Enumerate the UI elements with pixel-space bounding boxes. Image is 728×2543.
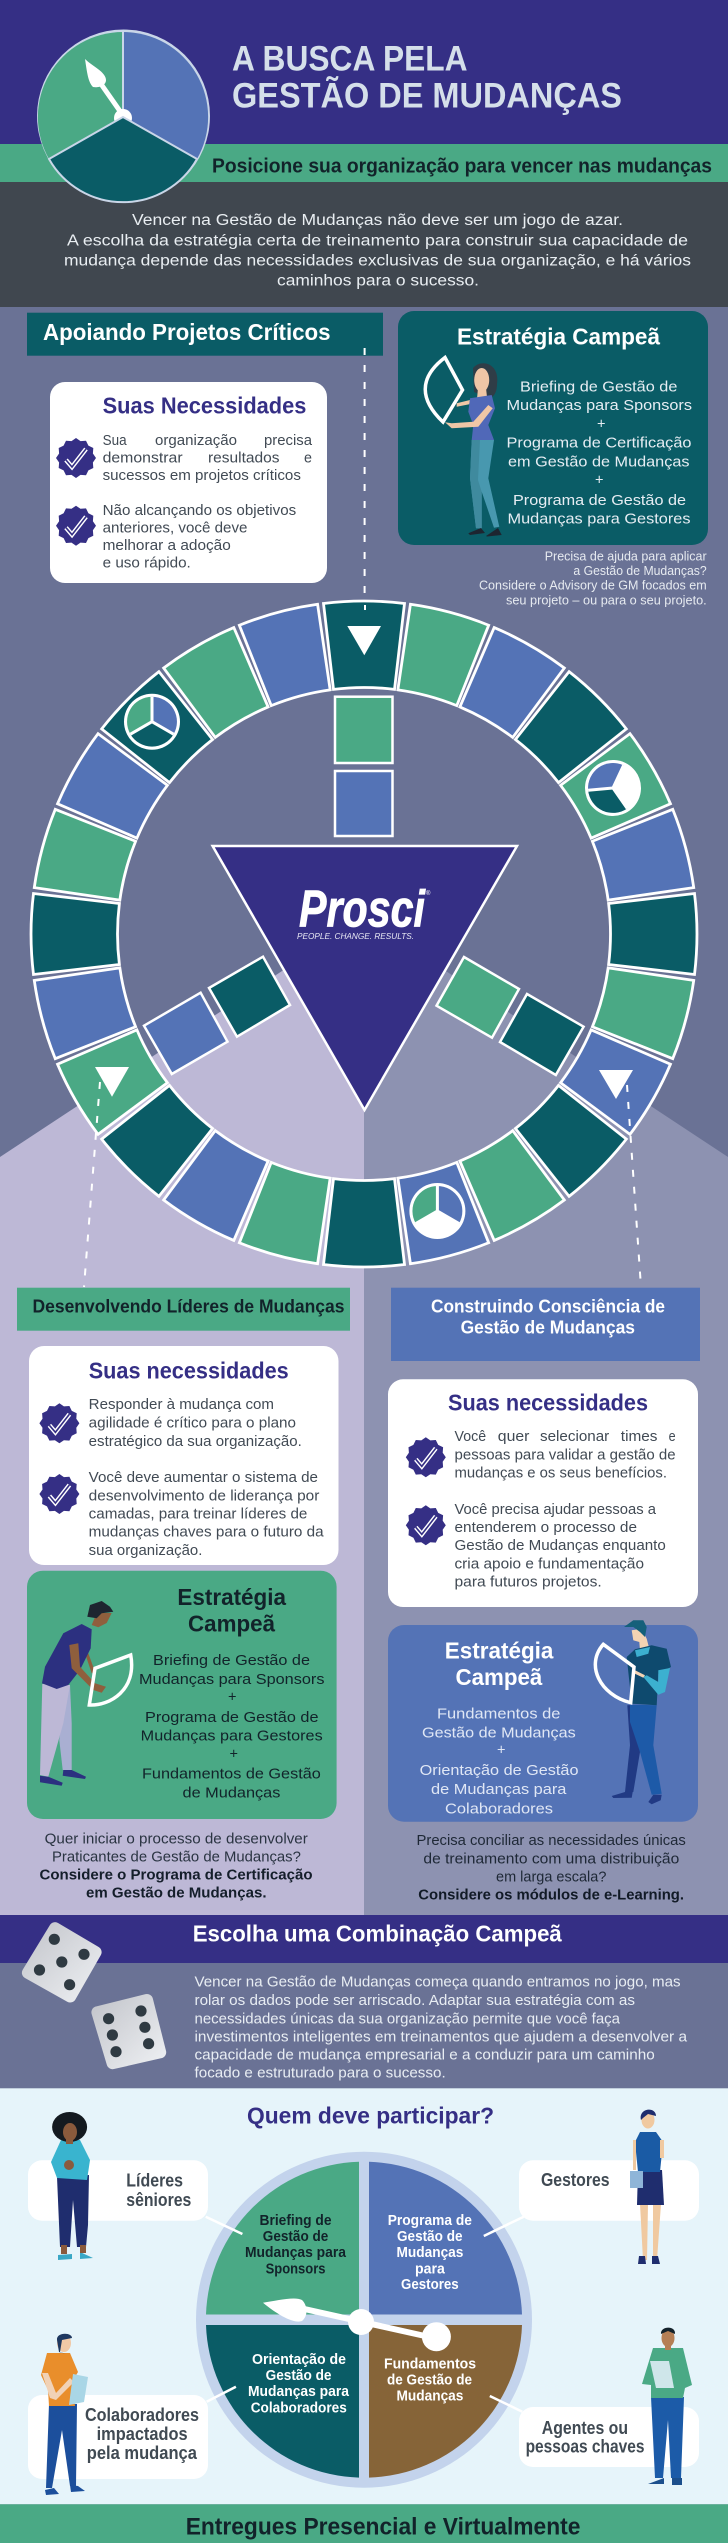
text block: combination [0, 1963, 728, 2088]
panel: Estratégia Campeã right: Estratégia [445, 1637, 554, 1663]
callout: Agentes [519, 2407, 699, 2467]
figure: woman holding wedge [425, 358, 502, 536]
figure: man in blue holding wedge [595, 1620, 671, 1804]
sector: Orientação: Orientação de [252, 2352, 346, 2368]
intro panel [0, 182, 728, 307]
sector: Briefing: Mudanças para [245, 2245, 347, 2261]
section heading: Escolha uma Combinação Campeã [0, 1915, 728, 1963]
caption: left: Considere o Programa de Certificação [40, 1867, 313, 1883]
panel: Suas necessidades right: pessoas para validar a gestão de [454, 1447, 676, 1463]
panel: Suas necessidades right: Suas necessidades [448, 1390, 648, 1416]
panel: Estratégia Campeã top: em Gestão de Mudanças [508, 455, 690, 471]
panel: Estratégia Campeã left: de Mudanças [182, 1786, 280, 1802]
logo triangle: Prosci [213, 846, 517, 1110]
caption: left [40, 1831, 313, 1901]
panel: Suas necessidades left: desenvolvimento de liderança por [89, 1489, 320, 1505]
callout: Líderes sêniores: Líderes [126, 2171, 183, 2191]
panel: Estratégia Campeã left: + [228, 1690, 236, 1706]
caption: advisory: seu projeto – ou para o seu projeto. [506, 593, 707, 607]
panel: Suas necessidades right: cria apoio e fundamentação [454, 1557, 644, 1573]
panel: Estratégia Campeã right: de Mudanças para [431, 1782, 567, 1798]
panel: Suas Necessidades top: demonstrar [103, 450, 183, 466]
panel: Estratégia Campeã top [398, 311, 708, 545]
caption: advisory [479, 550, 707, 607]
panel: Estratégia Campeã top: + [597, 416, 605, 432]
panel: Suas necessidades left [29, 1346, 338, 1565]
sector: Orientação: Colaboradores [251, 2400, 347, 2416]
callout: Líderes sêniores: sêniores [126, 2190, 191, 2210]
panel: Suas Necessidades top: e uso rápido. [103, 555, 191, 571]
dashed connector: top [364, 348, 366, 600]
sector: Programa: Mudanças [396, 2245, 463, 2261]
panel: Estratégia Campeã top: Programa de Certificação [506, 436, 692, 452]
sector: Programa: Programa de [388, 2213, 472, 2229]
panel: Estratégia Campeã right: Orientação de Gestão [420, 1763, 578, 1779]
callout: Colaboradores: pela mudança [87, 2443, 198, 2463]
panel: Estratégia Campeã top: Programa de Gestão de [513, 493, 686, 509]
dashed connector: left [84, 1082, 100, 1287]
needle [263, 2298, 451, 2351]
text block: combination: investimentos inteligentes em treinamentos que ajudem a desenvolver a [194, 2029, 688, 2045]
panel: who should attend [0, 2088, 728, 2504]
caption: advisory: a Gestão de Mudanças? [573, 564, 707, 578]
intro panel: caminhos para o sucesso. [277, 273, 479, 290]
card stack: inner left [144, 957, 290, 1074]
panel: Estratégia Campeã right: Colaboradores [445, 1801, 553, 1817]
caption: right [416, 1833, 686, 1903]
figure: manager woman [630, 2110, 664, 2264]
figure: agent man green [642, 2328, 692, 2485]
intro panel: A escolha da estratégia certa de treinamento para construir sua capacidade de [67, 232, 688, 250]
sector: Briefing: Sponsors [266, 2261, 326, 2277]
heading: Apoiando Projetos Críticos [27, 313, 383, 356]
panel: Suas necessidades left: Você deve aumentar o sistema de [89, 1470, 318, 1486]
dashed connector top over tile [364, 605, 366, 610]
panel: Estratégia Campeã top: Mudanças para Sponsors [506, 398, 692, 414]
sector: Fundamentos: Mudanças [396, 2389, 463, 2405]
panel: Suas Necessidades top: Suas Necessidades [103, 392, 306, 418]
panel: Suas necessidades left: Suas necessidades [89, 1357, 289, 1383]
callout: Líderes sêniores [28, 2160, 208, 2221]
sector: Orientação: Gestão de [266, 2368, 332, 2384]
logo triangle: Prosci: ® [426, 890, 431, 897]
sector: Programa: Gestores [401, 2277, 459, 2293]
text block: combination: capacidade de mudança empresarial e a conduzir para um caminho [194, 2047, 655, 2063]
icon: die six [97, 2000, 160, 2063]
heading: Construindo Consciência: Gestão de Mudanças [461, 1317, 635, 1337]
panel: Suas Necessidades top: Não alcançando os objetivos [103, 503, 296, 519]
panel: Estratégia Campeã left: Estratégia [177, 1584, 286, 1610]
panel: Estratégia Campeã left [27, 1571, 337, 1819]
panel: Estratégia Campeã right [388, 1620, 698, 1822]
figure: employee man orange [41, 2334, 88, 2495]
game board ring [31, 601, 697, 1267]
sector: Briefing: Gestão de [263, 2229, 328, 2245]
panel: Estratégia Campeã left: Fundamentos de Gestão [142, 1766, 321, 1782]
caption: left: em Gestão de Mudanças. [86, 1885, 266, 1901]
lower right background [364, 917, 728, 1915]
icon: triangle marker top [347, 626, 381, 655]
panel: Suas Necessidades top: precisa [264, 433, 313, 449]
logo triangle: Prosci: Prosci [299, 881, 426, 939]
section heading: Escolha uma Combinação Campeã: Escolha uma Combinação Campeã [193, 1921, 562, 1947]
panel: Suas necessidades left: mudanças chaves para o futuro da [89, 1525, 325, 1541]
caption: advisory: Precisa de ajuda para aplicar [545, 550, 707, 564]
sector: Fundamentos [369, 2325, 522, 2478]
sector: Programa: para [415, 2261, 446, 2277]
sector: Fundamentos: Fundamentos [384, 2357, 476, 2373]
caption: advisory: Considere o Advisory de GM focados em [479, 579, 707, 593]
sector: Programa [369, 2162, 522, 2314]
panel: Suas Necessidades top: sucessos em projetos críticos [103, 468, 301, 484]
panel: Estratégia Campeã left: Mudanças para Sponsors [139, 1672, 324, 1688]
heading: Apoiando Projetos Críticos: Apoiando Projetos Críticos [43, 319, 331, 345]
header band [0, 0, 728, 182]
badge 1 [56, 438, 96, 478]
callout: Colaboradores: Colaboradores [85, 2405, 199, 2425]
text block: combination: rolar os dados pode ser arriscado. Adaptar sua estratégia com as [194, 1993, 635, 2009]
sector: Programa: Gestão de [397, 2229, 462, 2245]
logo triangle: Prosci: PEOPLE. CHANGE. RESULTS. [297, 931, 414, 941]
panel: Suas necessidades right: entenderem o processo de [454, 1520, 637, 1536]
panel: Estratégia Campeã right: Gestão de Mudanças [422, 1725, 576, 1741]
caption: right: em larga escala? [496, 1870, 606, 1886]
caption: left: Quer iniciar o processo de desenvolver [45, 1831, 308, 1847]
chart: spinner of programs [196, 2152, 532, 2488]
sector: Briefing: Briefing de [260, 2213, 332, 2229]
callout: Agentes: Agentes ou [542, 2418, 628, 2438]
caption: right: Precisa conciliar as necessidades únicas [416, 1833, 686, 1849]
caption: right: de treinamento com uma distribuição [423, 1851, 679, 1867]
panel: Suas Necessidades top: organização [155, 433, 237, 449]
icon: triangle marker left [95, 1067, 129, 1097]
footer band [0, 2504, 728, 2543]
text block: combination: Vencer na Gestão de Mudanças começa quando entramos no jogo, mas [194, 1975, 681, 1991]
intro panel: Vencer na Gestão de Mudanças não deve ser um jogo de azar. [132, 212, 623, 229]
panel: Suas necessidades right: Você [454, 1429, 486, 1445]
panel: Suas necessidades left: estratégico da sua organização. [89, 1434, 302, 1450]
panel: Suas Necessidades top: resultados [208, 450, 280, 466]
panel: Estratégia Campeã right: Campeã [456, 1664, 543, 1690]
caption: left: Praticantes de Gestão de Mudanças? [52, 1850, 301, 1866]
intro panel: mudança depende das necessidades exclusivas de sua organização, e há vários [64, 253, 691, 270]
dashed connector: right [627, 1085, 641, 1287]
badge 1 [406, 1437, 446, 1477]
sector: Orientação [206, 2325, 359, 2478]
panel: Estratégia Campeã left: Briefing de Gestão de [153, 1653, 310, 1669]
icon: spinner on green tile [576, 751, 650, 825]
panel: Estratégia Campeã top: Briefing de Gestão de [520, 380, 677, 396]
panel: Suas Necessidades top [50, 382, 327, 583]
footer band: Entregues Presencial e Virtualmente [186, 2513, 580, 2540]
sector: Briefing [206, 2162, 359, 2314]
panel: Suas necessidades right: Gestão de Mudanças enquanto [454, 1538, 666, 1554]
icon: spinner on blue tile [409, 1183, 465, 1239]
panel: Suas Necessidades top: anteriores, você deve [103, 520, 247, 536]
card stack: inner top [335, 697, 392, 836]
panel: Suas necessidades left: agilidade é crítico para o plano [89, 1416, 296, 1432]
text block: combination: necessidades únicas da sua organização permite que você faça [194, 2011, 621, 2027]
panel: Suas necessidades right [388, 1379, 698, 1607]
callout: Colaboradores [28, 2395, 208, 2479]
caption: right: Considere os módulos de e-Learning. [418, 1887, 684, 1903]
panel: Estratégia Campeã top: Mudanças para Gestores [508, 511, 690, 527]
panel: Suas Necessidades top: Sua [103, 433, 127, 449]
panel: Estratégia Campeã right: Fundamentos de [437, 1706, 560, 1722]
panel: Suas necessidades right: Você precisa ajudar pessoas a [454, 1502, 657, 1518]
callout: Colaboradores: impactados [97, 2424, 188, 2444]
sector: Orientação: Mudanças para [248, 2384, 350, 2400]
sector: Fundamentos: de Gestão de [387, 2372, 472, 2388]
panel: Estratégia Campeã right: + [497, 1742, 505, 1758]
panel: Estratégia Campeã top: Estratégia Campeã [457, 324, 660, 350]
panel: Suas necessidades right: quer [498, 1429, 530, 1445]
panel: Suas necessidades left: sua organização. [89, 1543, 202, 1559]
panel: Suas necessidades right: mudanças e os seus benefícios. [454, 1465, 667, 1481]
callout: Gestores: Gestores [541, 2170, 610, 2190]
lower left background [0, 917, 364, 1915]
title [232, 40, 622, 115]
badge 1 [39, 1403, 79, 1443]
panel: Suas Necessidades top: melhorar a adoção [103, 538, 231, 554]
panel: Estratégia Campeã left: + [230, 1746, 238, 1762]
title: GESTÃO DE MUDANÇAS [232, 76, 622, 115]
figure: man holding wedge [40, 1601, 132, 1786]
card stack: inner right [436, 957, 584, 1075]
heading: Quem deve participar?: Quem deve participar? [247, 2102, 494, 2128]
panel: Estratégia Campeã left: Campeã [188, 1610, 275, 1636]
heading: Construindo Consciência: Construindo Consciência de [431, 1297, 665, 1317]
icon: header spinner wheel [37, 30, 210, 202]
heading: Desenvolvendo Líderes de Mudanças [17, 1288, 350, 1331]
panel: Suas necessidades right: selecionar [540, 1429, 609, 1445]
panel: Estratégia Campeã top: + [595, 472, 603, 488]
badge 2 [56, 506, 96, 546]
icon: die five [28, 1928, 96, 1996]
panel: Suas necessidades left: camadas, para treinar líderes de [89, 1507, 307, 1523]
figure: senior leader woman [51, 2112, 93, 2260]
callout: Gestores [519, 2160, 699, 2221]
panel: Estratégia Campeã left: Mudanças para Gestores [141, 1728, 323, 1744]
title: A BUSCA PELA [232, 40, 468, 79]
panel: Suas necessidades right: times [621, 1429, 658, 1445]
connectors: callout leaders [206, 2217, 524, 2412]
icon: spinner on teal tile [124, 694, 180, 750]
badge 2 [39, 1474, 79, 1514]
icon: triangle marker right [599, 1070, 633, 1099]
heading: Desenvolvendo Líderes de Mudanças: Desenvolvendo Líderes de Mudanças [32, 1297, 344, 1317]
badge 2 [406, 1505, 446, 1545]
panel: Estratégia Campeã left: Programa de Gestão de [145, 1710, 318, 1726]
panel: Suas necessidades right: para futuros projetos. [454, 1575, 602, 1591]
panel: Suas Necessidades top: e [304, 450, 312, 466]
panel: Suas necessidades right: e [669, 1429, 676, 1445]
heading: Construindo Consciência [391, 1288, 700, 1361]
text block: combination: focado e estruturado para o sucesso. [194, 2066, 446, 2082]
panel: Suas necessidades left: Responder à mudança com [89, 1397, 274, 1413]
callout: Agentes: pessoas chaves [526, 2437, 644, 2457]
